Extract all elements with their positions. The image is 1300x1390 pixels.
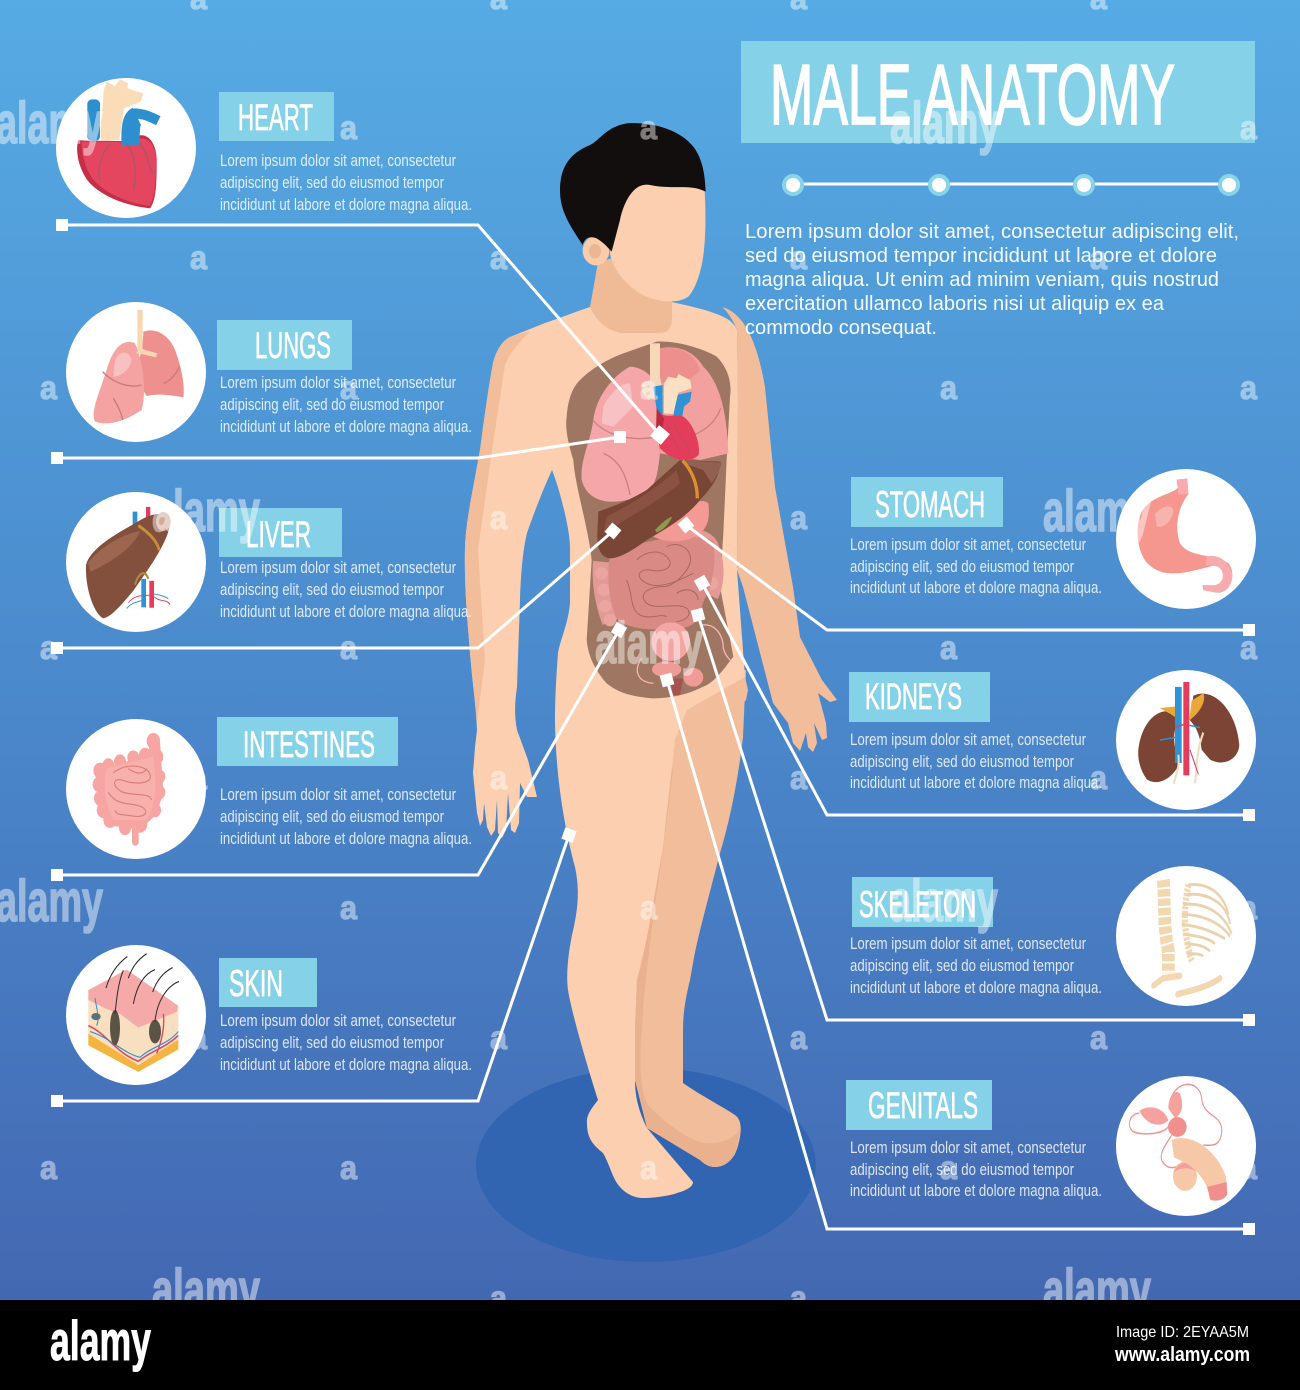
watermark tiles: a <box>940 369 958 406</box>
watermark tiles: alamy <box>890 869 998 934</box>
description: lungs: incididunt ut labore et dolore magna aliqua. <box>220 418 472 436</box>
watermark tiles: a <box>640 1149 658 1186</box>
watermark tiles: a <box>340 629 358 666</box>
description: liver <box>220 559 472 621</box>
watermark tiles: a <box>340 889 358 926</box>
connector: liver <box>51 523 621 654</box>
watermark tiles: alamy <box>595 611 703 676</box>
description: skeleton: adipiscing elit, sed do eiusmod tempor <box>850 957 1074 975</box>
human body figure <box>465 123 837 1198</box>
footer bar: Image ID: 2EYAA5M <box>1116 1324 1249 1341</box>
footer bar: www.alamy.com <box>1114 1344 1250 1366</box>
connector: lungs <box>51 431 626 464</box>
description: kidneys: Lorem ipsum dolor sit amet, consectetur <box>850 731 1086 749</box>
icon circle: heart <box>56 78 196 218</box>
watermark tiles: a <box>190 759 208 796</box>
intro paragraph: sed do eiusmod tempor incididunt ut labore et dolore <box>745 245 1217 267</box>
label: liver: LIVER <box>246 514 311 555</box>
icon circle: skin <box>66 945 206 1085</box>
footer bar <box>0 1300 1300 1390</box>
watermark tiles: a <box>790 499 808 536</box>
watermark tiles: a <box>1240 889 1258 926</box>
description: skeleton: Lorem ipsum dolor sit amet, consectetur <box>850 935 1086 953</box>
description: intestines: adipiscing elit, sed do eiusmod tempor <box>220 808 444 826</box>
watermark tiles: a <box>190 1019 208 1056</box>
watermark tiles: alamy <box>1043 1258 1151 1323</box>
connector: stomach <box>678 517 1255 636</box>
label: intestines <box>217 717 398 766</box>
watermark tiles: a <box>340 109 358 146</box>
stomach <box>653 501 709 541</box>
panel: stomach <box>850 469 1256 609</box>
description: liver: Lorem ipsum dolor sit amet, consectetur <box>220 559 456 577</box>
watermark tiles: alamy <box>0 869 103 934</box>
description: lungs <box>220 374 472 436</box>
intro paragraph: exercitation ullamco laboris nisi ut aliquip ex ea <box>745 293 1165 315</box>
watermark tiles: a <box>340 369 358 406</box>
label: skeleton <box>852 877 993 927</box>
watermark tiles: a <box>790 239 808 276</box>
watermark tiles: a <box>340 1149 358 1186</box>
footer bar: alamy <box>50 1309 151 1372</box>
watermark tiles: a <box>1240 1149 1258 1186</box>
internal organs <box>566 341 733 698</box>
watermark tiles: a <box>40 629 58 666</box>
watermark tiles: alamy <box>152 479 260 544</box>
watermark tiles: a <box>1240 369 1258 406</box>
label: heart <box>219 92 334 141</box>
heart <box>642 374 699 460</box>
watermark tiles: alamy <box>152 1258 260 1323</box>
description: intestines: Lorem ipsum dolor sit amet, consectetur <box>220 786 456 804</box>
face <box>610 180 705 301</box>
description: lungs: adipiscing elit, sed do eiusmod tempor <box>220 396 444 414</box>
right leg (back) <box>635 670 746 1167</box>
icon circle: stomach <box>1116 469 1256 609</box>
description: lungs: Lorem ipsum dolor sit amet, consectetur <box>220 374 456 392</box>
ear <box>583 236 609 265</box>
description: genitals: incididunt ut labore et dolore magna aliqua. <box>850 1182 1102 1200</box>
description: heart: incididunt ut labore et dolore magna aliqua. <box>220 196 472 214</box>
watermark tiles: a <box>940 629 958 666</box>
description: heart <box>220 152 472 214</box>
watermark tiles: a <box>490 1279 508 1316</box>
description: liver: adipiscing elit, sed do eiusmod tempor <box>220 581 444 599</box>
watermark tiles: a <box>790 1019 808 1056</box>
connector: skin <box>51 827 577 1107</box>
description: heart: Lorem ipsum dolor sit amet, consectetur <box>220 152 456 170</box>
label: heart: HEART <box>238 97 313 138</box>
watermark tiles: a <box>790 1279 808 1316</box>
intro paragraph: commodo consequat. <box>745 317 937 339</box>
label: genitals: GENITALS <box>868 1085 978 1126</box>
watermark tiles: a <box>1090 759 1108 796</box>
connector: skeleton <box>691 608 1255 1026</box>
panel: liver <box>66 492 472 632</box>
description: kidneys: incididunt ut labore et dolore magna aliqua. <box>850 774 1102 792</box>
description: skeleton: incididunt ut labore et dolore magna aliqua. <box>850 979 1102 997</box>
large intestine <box>595 538 718 626</box>
icon circle: kidneys <box>1116 670 1256 810</box>
panel: intestines <box>66 717 472 859</box>
intro paragraph <box>745 221 1239 339</box>
watermark tiles: a <box>190 239 208 276</box>
label: lungs <box>217 320 352 370</box>
description: intestines <box>220 786 472 848</box>
icon circle: skeleton <box>1116 866 1256 1006</box>
description: intestines: incididunt ut labore et dolore magna aliqua. <box>220 830 472 848</box>
ureter <box>702 625 732 662</box>
watermark tiles: alamy <box>0 91 103 156</box>
panel: skin <box>66 945 472 1085</box>
hair <box>560 123 706 252</box>
label: liver <box>219 508 342 557</box>
front lung <box>581 367 660 502</box>
description: kidneys <box>850 731 1102 792</box>
watermark tiles: a <box>790 759 808 796</box>
description: skeleton <box>850 935 1102 997</box>
right arm and hand <box>722 307 837 752</box>
small intestine <box>608 537 715 630</box>
watermark tiles: a <box>640 109 658 146</box>
label: intestines: INTESTINES <box>243 724 375 765</box>
description: skin: adipiscing elit, sed do eiusmod tempor <box>220 1034 444 1052</box>
panel: kidneys <box>849 670 1256 810</box>
watermark tiles: a <box>1090 1019 1108 1056</box>
watermark tiles: a <box>640 889 658 926</box>
watermark tiles: a <box>490 239 508 276</box>
left arm outer shade <box>465 331 530 722</box>
main torso, left arm and left leg <box>465 295 745 1198</box>
floor ellipse under figure <box>476 1068 816 1262</box>
watermark tiles: a <box>1090 239 1108 276</box>
watermark tiles: alamy <box>1043 479 1151 544</box>
watermark tiles: a <box>40 369 58 406</box>
description: stomach: Lorem ipsum dolor sit amet, consectetur <box>850 536 1086 554</box>
icon circle: liver <box>66 492 206 632</box>
watermark tiles: a <box>40 1149 58 1186</box>
liver <box>597 460 721 558</box>
icon circle: lungs <box>66 302 206 442</box>
panel: heart <box>56 78 472 218</box>
watermark tiles: a <box>490 1019 508 1056</box>
intro paragraph: magna aliqua. Ut enim ad minim veniam, quis nostrud <box>745 269 1219 291</box>
hip crease <box>675 677 748 745</box>
label: skin: SKIN <box>229 963 283 1004</box>
description: skin <box>220 1012 472 1074</box>
description: genitals: Lorem ipsum dolor sit amet, consectetur <box>850 1139 1086 1157</box>
watermark tiles: a <box>640 369 658 406</box>
watermark tiles: a <box>1240 109 1258 146</box>
label: kidneys: KIDNEYS <box>865 676 962 717</box>
description: kidneys: adipiscing elit, sed do eiusmod tempor <box>850 753 1074 771</box>
description: stomach: adipiscing elit, sed do eiusmod tempor <box>850 558 1074 576</box>
label: genitals <box>846 1080 992 1130</box>
bladder and genital organs <box>637 622 703 695</box>
trachea <box>650 343 660 383</box>
watermark tiles: a <box>1240 629 1258 666</box>
label: lungs: LUNGS <box>255 325 331 366</box>
panel: skeleton <box>850 866 1256 1006</box>
timeline dots <box>784 176 1238 194</box>
watermark tiles: a <box>490 759 508 796</box>
back lung <box>660 347 728 460</box>
intro paragraph: Lorem ipsum dolor sit amet, consectetur adipiscing elit, <box>745 221 1239 243</box>
icon circle: intestines <box>66 719 206 859</box>
watermark tiles: a <box>490 499 508 536</box>
connector: kidneys <box>694 575 1255 821</box>
label: skeleton: SKELETON <box>859 884 976 925</box>
connector: heart <box>56 219 670 445</box>
label: stomach: STOMACH <box>875 484 985 525</box>
description: stomach: incididunt ut labore et dolore magna aliqua. <box>850 579 1102 597</box>
body cavity <box>566 341 733 698</box>
panel: genitals <box>846 1076 1256 1216</box>
watermark tiles: a <box>940 1149 958 1186</box>
icon circle: genitals <box>1116 1076 1256 1216</box>
connector: genitals <box>660 673 1255 1235</box>
description: genitals: adipiscing elit, sed do eiusmod tempor <box>850 1161 1074 1179</box>
watermark tiles: alamy <box>890 91 1000 156</box>
description: skin: Lorem ipsum dolor sit amet, consectetur <box>220 1012 456 1030</box>
neck shadow <box>590 255 672 333</box>
label: kidneys <box>849 672 990 722</box>
label: stomach <box>851 477 1003 527</box>
description: stomach <box>850 536 1102 597</box>
description: heart: adipiscing elit, sed do eiusmod tempor <box>220 174 444 192</box>
panel: lungs <box>66 302 472 442</box>
connector: intestines <box>51 622 627 881</box>
description: liver: incididunt ut labore et dolore magna aliqua. <box>220 603 472 621</box>
description: genitals <box>850 1139 1102 1200</box>
description: skin: incididunt ut labore et dolore magna aliqua. <box>220 1056 472 1074</box>
